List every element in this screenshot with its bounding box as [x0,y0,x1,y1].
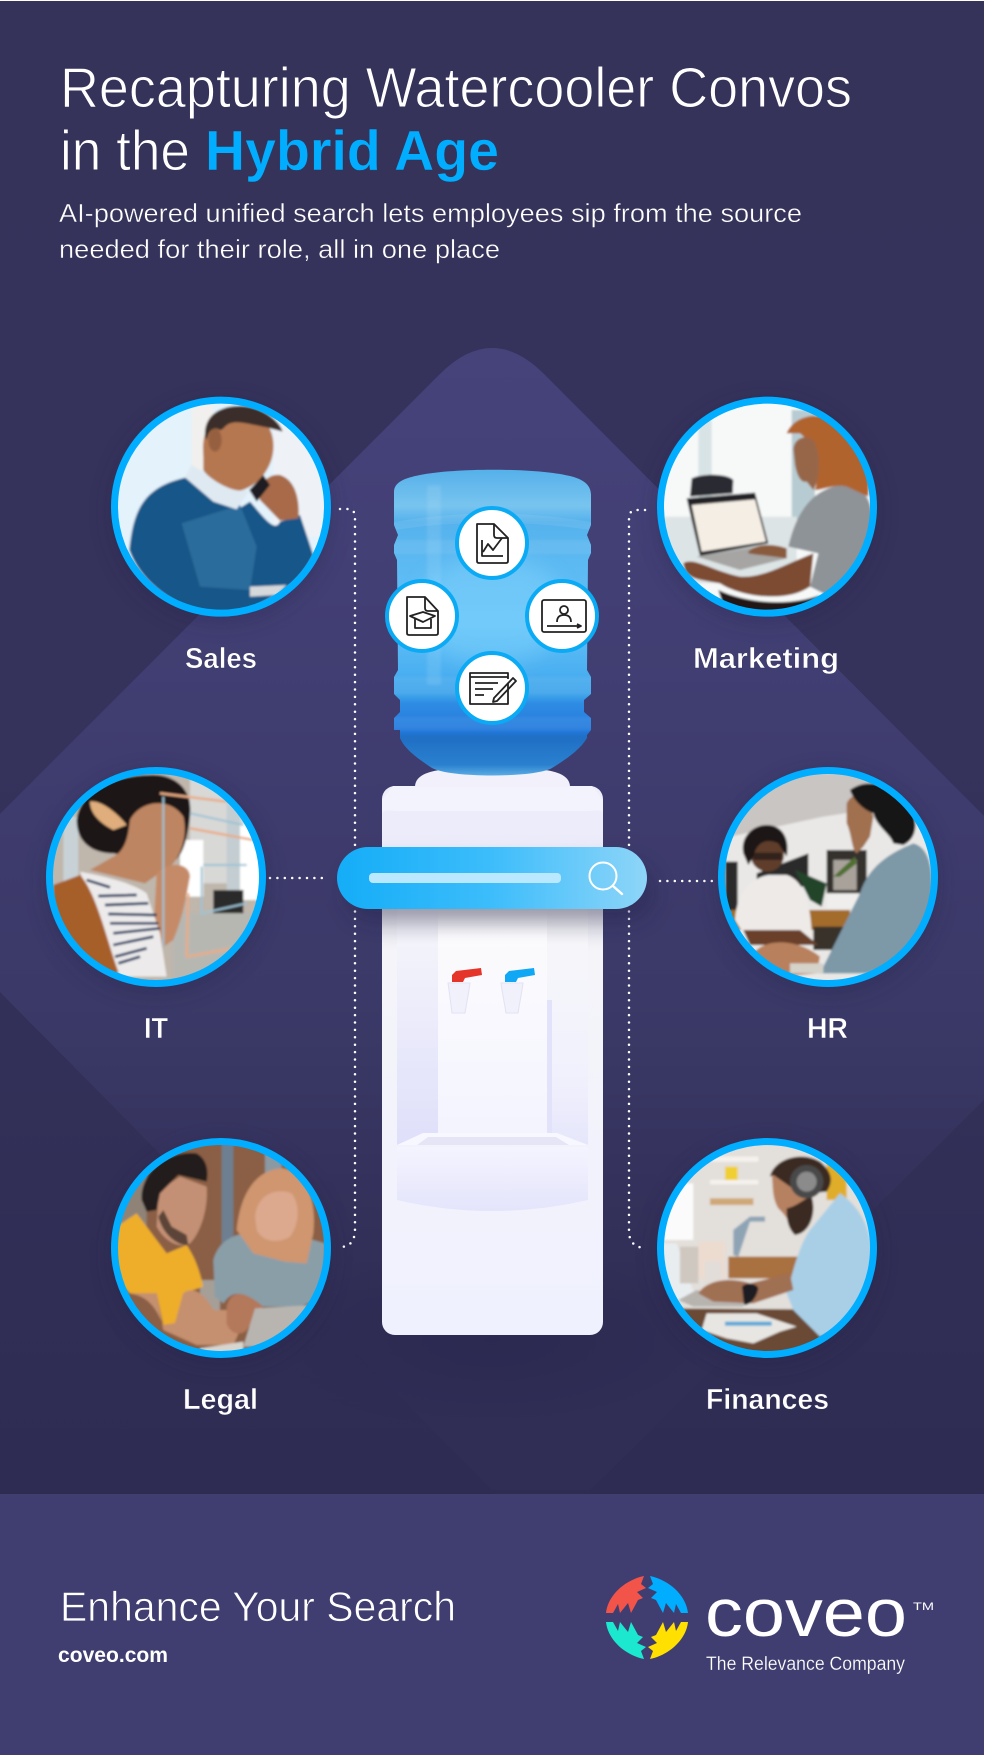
label: marketing: Marketing [693,643,839,675]
title [60,56,852,183]
background diamond [0,348,984,1490]
icon: notes with pen [457,653,527,723]
red tap [452,968,482,982]
subtitle [59,198,802,264]
recess inner strip [547,1000,552,1134]
photo: woman at laptop [657,400,877,620]
cooler neck cap [415,770,570,787]
search bar [337,847,647,909]
title: Hybrid Age [205,119,499,183]
subtitle: needed for their role, all in one place [59,234,500,264]
photo: two people at laptop [113,1141,330,1360]
photo: man on phone [113,400,330,617]
top edge [0,0,984,1]
search bar shadow [345,862,655,922]
icon: document with graduation cap [387,581,457,651]
label: hr: HR [807,1013,848,1045]
cooler body [382,786,603,1335]
red tap cup [448,983,470,1013]
photo: woman at glass board [47,770,267,990]
icon: video presenter screen [527,581,597,651]
label: sales: Sales [185,643,257,675]
water bottle [390,470,595,776]
dotted connectors [270,509,716,1248]
icon: magnifier [590,862,622,894]
panel: hr [717,770,943,1045]
photo: man with headphones at laptop [657,1141,880,1357]
coveo wordmark: coveo [705,1575,907,1651]
drip tray front [397,1147,588,1211]
blue tap cup [501,983,523,1013]
icon: document with chart [457,508,527,578]
circle shadows [44,400,940,1366]
cooler ground shadow [262,1250,722,1430]
panel: footer [0,1494,984,1755]
footer heading: Enhance Your Search [60,1583,456,1630]
label: finances: Finances [706,1384,829,1416]
panel: it [47,770,267,1045]
panel: sales [113,400,330,675]
icon: coveo logo mark [606,1576,688,1659]
tagline: The Relevance Company [706,1654,905,1675]
cooler shoulder [382,786,603,815]
subtitle: AI-powered unified search lets employees sip from the source [59,198,802,228]
label: it: IT [144,1013,168,1045]
right recess [547,909,588,1145]
center recess [438,909,547,1135]
panel: marketing [657,400,877,675]
blue tap [505,968,535,982]
label: legal: Legal [183,1384,258,1416]
panel: legal [113,1141,330,1416]
trademark: TM [913,1601,934,1613]
panel: finances [657,1141,880,1416]
footer url: coveo.com [58,1644,168,1667]
title: in the [60,119,190,183]
water cooler [382,770,603,1335]
drip tray basin [417,1137,569,1145]
left recess [397,909,438,1145]
title: Recapturing Watercooler Convos [60,56,852,120]
drip tray top [397,1133,588,1145]
photo: two colleagues talking [717,770,943,990]
